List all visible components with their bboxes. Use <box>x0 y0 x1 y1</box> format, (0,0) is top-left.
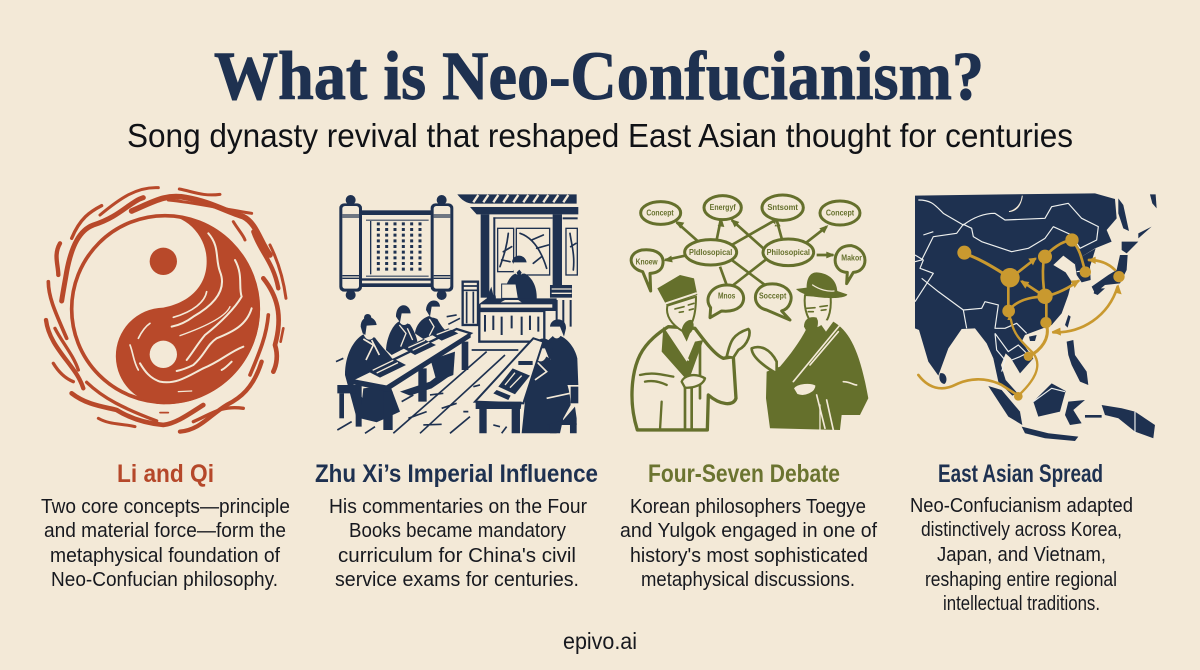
panel: Zhu Xi's Imperial Influence <box>315 194 598 591</box>
concept labels: Philosopical <box>767 248 810 257</box>
concept connectors <box>663 218 835 285</box>
landmass <box>915 193 1157 441</box>
scroll <box>339 195 453 300</box>
icon: classroom with scroll and scholars <box>336 194 578 433</box>
concept bubbles <box>631 195 865 320</box>
subtitle: Song dynasty revival that reshaped East Asian thought for centuries <box>127 118 1073 155</box>
icon: yin-yang with flowing qi <box>46 188 286 432</box>
text: East Asian Spread description: Japan, and Vietnam, <box>937 543 1106 566</box>
teacher desk <box>463 282 572 342</box>
icon: map of East Asia with spread routes <box>915 193 1157 441</box>
concept labels <box>636 203 862 301</box>
panel: Li and Qi <box>41 188 290 591</box>
concept labels: Mnos <box>718 292 736 301</box>
text: Zhu Xi description: service exams for centuries. <box>335 568 579 591</box>
text: East Asian Spread description: reshaping entire regional <box>925 568 1117 591</box>
text: Zhu Xi description <box>329 495 587 591</box>
concept labels: Sntsomt <box>767 203 798 212</box>
text: East Asian Spread description: distinctively across Korea, <box>921 518 1122 541</box>
concept labels: Knoew <box>636 257 658 266</box>
borders <box>915 200 1135 433</box>
teacher <box>487 256 537 303</box>
concept labels: Soccept <box>759 292 787 301</box>
text: Zhu Xi description: curriculum for China's civil <box>338 544 576 567</box>
panel: East Asian Spread <box>910 193 1157 615</box>
text: Four-Seven description <box>620 495 877 591</box>
text: Four-Seven description: Korean philosophers Toegye <box>630 495 866 518</box>
text: Li and Qi description <box>41 495 290 591</box>
panel: Four-Seven Debate <box>620 195 877 591</box>
icon: two scholars debating under a concept web <box>631 195 868 430</box>
text: Li and Qi description: metaphysical foundation of <box>50 544 280 567</box>
concept labels: Pldlosopical <box>689 248 732 257</box>
route nodes <box>957 233 1125 401</box>
text: Zhu Xi description: His commentaries on the Four <box>329 495 587 518</box>
text: Li and Qi description: Two core concepts—principle <box>41 495 290 518</box>
left long table <box>337 328 471 430</box>
text: Four-Seven description: and Yulgok engaged in one of <box>620 519 877 542</box>
pavilion <box>457 194 578 298</box>
footer: epivo.ai: epivo.ai <box>563 628 637 654</box>
concept labels: Concept <box>826 208 854 217</box>
left students <box>345 301 455 422</box>
text: Zhu Xi description: Books became mandatory <box>349 519 567 542</box>
routes <box>918 240 1118 396</box>
title: What is Neo-Confucianism? <box>214 38 984 114</box>
concept labels: Makor <box>841 254 862 263</box>
right scholar <box>752 272 868 430</box>
right table and students <box>475 319 578 433</box>
text: East Asian Spread description: intellectual traditions. <box>943 592 1100 615</box>
heading: Four-Seven Debate: Four-Seven Debate <box>648 460 840 488</box>
floor lines <box>336 315 518 433</box>
heading: East Asian Spread: East Asian Spread <box>938 460 1103 488</box>
text: Li and Qi description: Neo-Confucian philosophy. <box>51 568 278 591</box>
left scholar <box>632 275 750 430</box>
text: Li and Qi description: and material force—form the <box>44 519 286 542</box>
text: Four-Seven description: history's most sophisticated <box>630 544 868 567</box>
text: Four-Seven description: metaphysical discussions. <box>641 568 855 591</box>
text: East Asian Spread description <box>910 494 1133 615</box>
concept labels: Energyf <box>710 203 736 212</box>
heading: Zhu Xi's Imperial Influence: Zhu Xi’s Imperial Influence <box>315 460 598 488</box>
text: East Asian Spread description: Neo-Confucianism adapted <box>910 494 1133 517</box>
heading: Li and Qi: Li and Qi <box>117 460 214 488</box>
concept labels: Concept <box>646 208 674 217</box>
